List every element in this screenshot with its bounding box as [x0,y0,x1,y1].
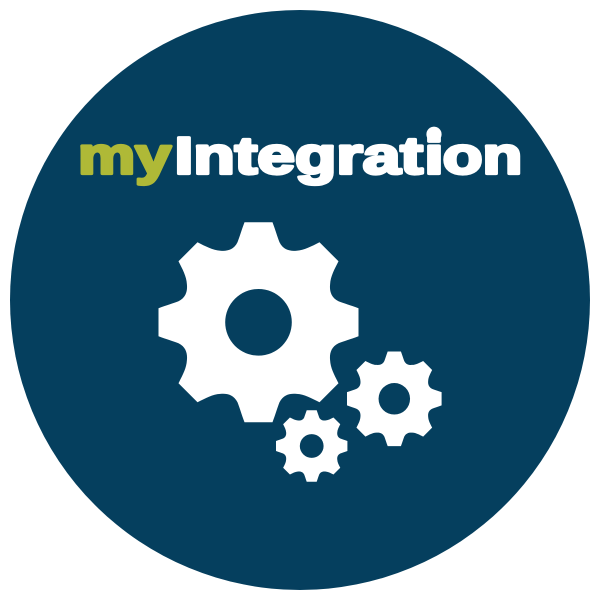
title part: my: my [78,128,171,186]
icon: large gear [158,222,358,422]
icon: medium gear [347,352,442,446]
title part: Integration: i [424,128,444,186]
title part: Integration [174,127,522,186]
title part: Integration: Integrat [174,128,423,186]
title: myIntegration [78,127,522,186]
title part: Integration: on [443,128,522,186]
icon: small gear [276,410,347,482]
